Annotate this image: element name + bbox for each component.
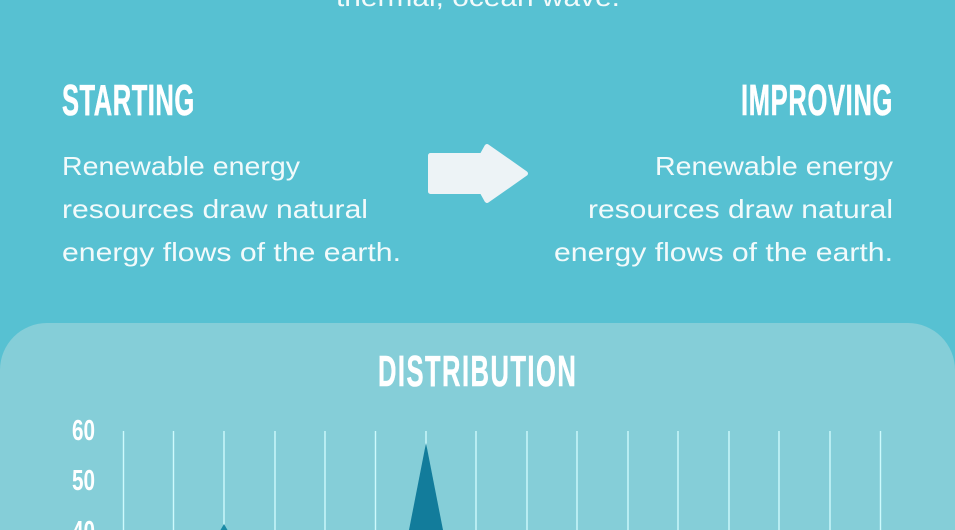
text block: starting: resources draw natural bbox=[62, 194, 368, 224]
text block: improving bbox=[554, 151, 893, 267]
heading: distribution: DISTRIBUTION bbox=[378, 346, 576, 396]
text block: starting bbox=[62, 151, 401, 267]
panel: starting bbox=[62, 75, 401, 267]
text block: starting: energy flows of the earth. bbox=[62, 237, 401, 267]
y axis labels bbox=[72, 415, 95, 530]
peak: small bbox=[220, 524, 228, 530]
y axis labels: 60 bbox=[72, 415, 95, 447]
heading: improving: IMPROVING bbox=[741, 75, 892, 125]
panel: distribution bbox=[0, 323, 955, 530]
peak: large bbox=[409, 443, 443, 530]
text block: starting: Renewable energy bbox=[62, 151, 300, 181]
text block: improving: energy flows of the earth. bbox=[554, 237, 893, 267]
text block: improving: resources draw natural bbox=[588, 194, 893, 224]
panel: improving bbox=[554, 75, 893, 267]
arrow bbox=[430, 146, 526, 200]
chart: area chart bbox=[72, 415, 880, 530]
heading: starting: STARTING bbox=[62, 75, 194, 125]
text block: improving: Renewable energy bbox=[655, 151, 893, 181]
y axis labels: 50 bbox=[72, 465, 95, 497]
